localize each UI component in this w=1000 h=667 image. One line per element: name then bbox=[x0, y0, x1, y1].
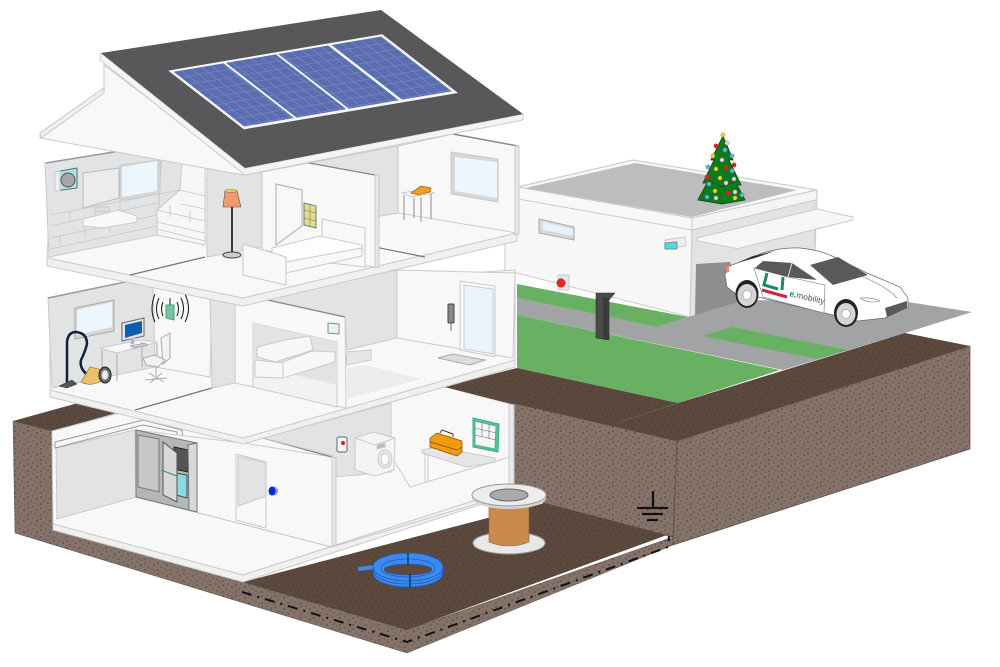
roof bbox=[100, 10, 523, 175]
christmas tree bbox=[698, 133, 745, 204]
canopy bbox=[697, 209, 853, 249]
washing machine bbox=[355, 432, 395, 476]
lawn strip by drive bbox=[702, 327, 848, 359]
distribution cabinet bbox=[136, 430, 197, 512]
wall behind living room bbox=[263, 270, 397, 350]
grille bbox=[885, 301, 907, 317]
car bbox=[725, 248, 908, 327]
partition bbox=[332, 457, 336, 547]
desk bbox=[100, 340, 158, 381]
earthing cable bbox=[242, 536, 669, 642]
soil: inner trench wall bbox=[513, 403, 677, 537]
right wall middle floor bbox=[397, 270, 515, 358]
windshield bbox=[810, 257, 868, 285]
upper right window bbox=[451, 152, 498, 202]
gable wall and soffit bbox=[40, 65, 243, 175]
bed bbox=[243, 219, 365, 285]
basement front wall bbox=[136, 430, 332, 547]
garage flat roof bbox=[525, 163, 797, 217]
bollard bbox=[596, 293, 615, 340]
solar panels bbox=[168, 34, 458, 129]
e.mobility text: e.mobility bbox=[789, 288, 827, 306]
e.mobility livery bbox=[764, 273, 783, 290]
soil: left and front block side bbox=[13, 421, 673, 653]
intercom bbox=[448, 304, 454, 331]
bedroom door bbox=[276, 184, 302, 245]
door mat bbox=[438, 354, 485, 365]
rear light bbox=[726, 265, 729, 273]
upper floor bbox=[45, 134, 519, 306]
middle window bbox=[75, 300, 114, 339]
middle wall white part bbox=[153, 285, 212, 377]
front wheel bbox=[834, 299, 858, 327]
bathroom back wall bbox=[45, 145, 162, 257]
washbasin bbox=[83, 207, 137, 228]
bathroom mirror bbox=[83, 168, 119, 208]
floor lamp bbox=[223, 190, 241, 258]
garage wall sensor bbox=[665, 237, 686, 249]
red outlet bbox=[557, 275, 569, 290]
toolbox bbox=[430, 430, 462, 456]
basement floor bbox=[52, 387, 514, 582]
soil: right block front bbox=[673, 346, 970, 545]
car windows bbox=[755, 261, 817, 280]
basement grey wall bbox=[56, 430, 136, 519]
middle left wall grey bbox=[48, 281, 155, 388]
basement pipe bbox=[55, 420, 183, 448]
lawn strip back bbox=[517, 284, 688, 327]
living opening bbox=[253, 323, 337, 407]
office chair bbox=[143, 333, 170, 383]
rug bbox=[347, 365, 421, 399]
rear wheel bbox=[736, 280, 758, 308]
soil: right block top bbox=[443, 333, 970, 441]
monitor bbox=[122, 318, 148, 348]
cable spool bbox=[472, 484, 546, 554]
wireless device bbox=[152, 294, 188, 322]
wall box bbox=[328, 323, 339, 334]
soil: excavated floor bbox=[243, 503, 667, 630]
basement right wall bbox=[391, 388, 513, 497]
basement door bbox=[236, 454, 266, 528]
earth symbol bbox=[637, 491, 668, 520]
bathroom side wall bbox=[157, 150, 205, 245]
vacuum cleaner bbox=[59, 332, 111, 388]
far grey wall bbox=[309, 146, 398, 217]
bedroom wall bbox=[262, 163, 375, 267]
red device bbox=[337, 437, 347, 452]
right room wall bbox=[398, 134, 518, 233]
blue knob bbox=[268, 486, 278, 496]
basement back grey wall bbox=[263, 403, 391, 477]
lawn front bbox=[517, 315, 780, 403]
sofa bbox=[255, 336, 335, 378]
garage facade bbox=[690, 200, 815, 317]
living partition bbox=[235, 299, 346, 408]
yellow panel bbox=[304, 203, 316, 228]
garage bbox=[505, 160, 853, 317]
middle slab bbox=[50, 360, 515, 444]
driveway bbox=[517, 298, 972, 370]
bathroom window bbox=[120, 160, 160, 200]
bath tiles bbox=[50, 190, 205, 249]
soil: left top bbox=[13, 403, 120, 431]
side table with phone bbox=[402, 186, 434, 222]
car door panel bbox=[754, 268, 825, 313]
garage door opening bbox=[695, 262, 745, 316]
coffee table bbox=[346, 350, 371, 365]
floor slab edge bbox=[53, 488, 513, 582]
heat pump unit bbox=[55, 168, 77, 191]
middle door bbox=[460, 281, 495, 357]
wall beside lamp bbox=[207, 167, 262, 257]
middle floor bbox=[48, 270, 515, 444]
upper slab edge bbox=[47, 233, 517, 306]
green panel bbox=[473, 418, 499, 452]
workbench bbox=[422, 447, 495, 482]
garage window bbox=[539, 219, 574, 240]
blue coil bbox=[358, 553, 443, 587]
